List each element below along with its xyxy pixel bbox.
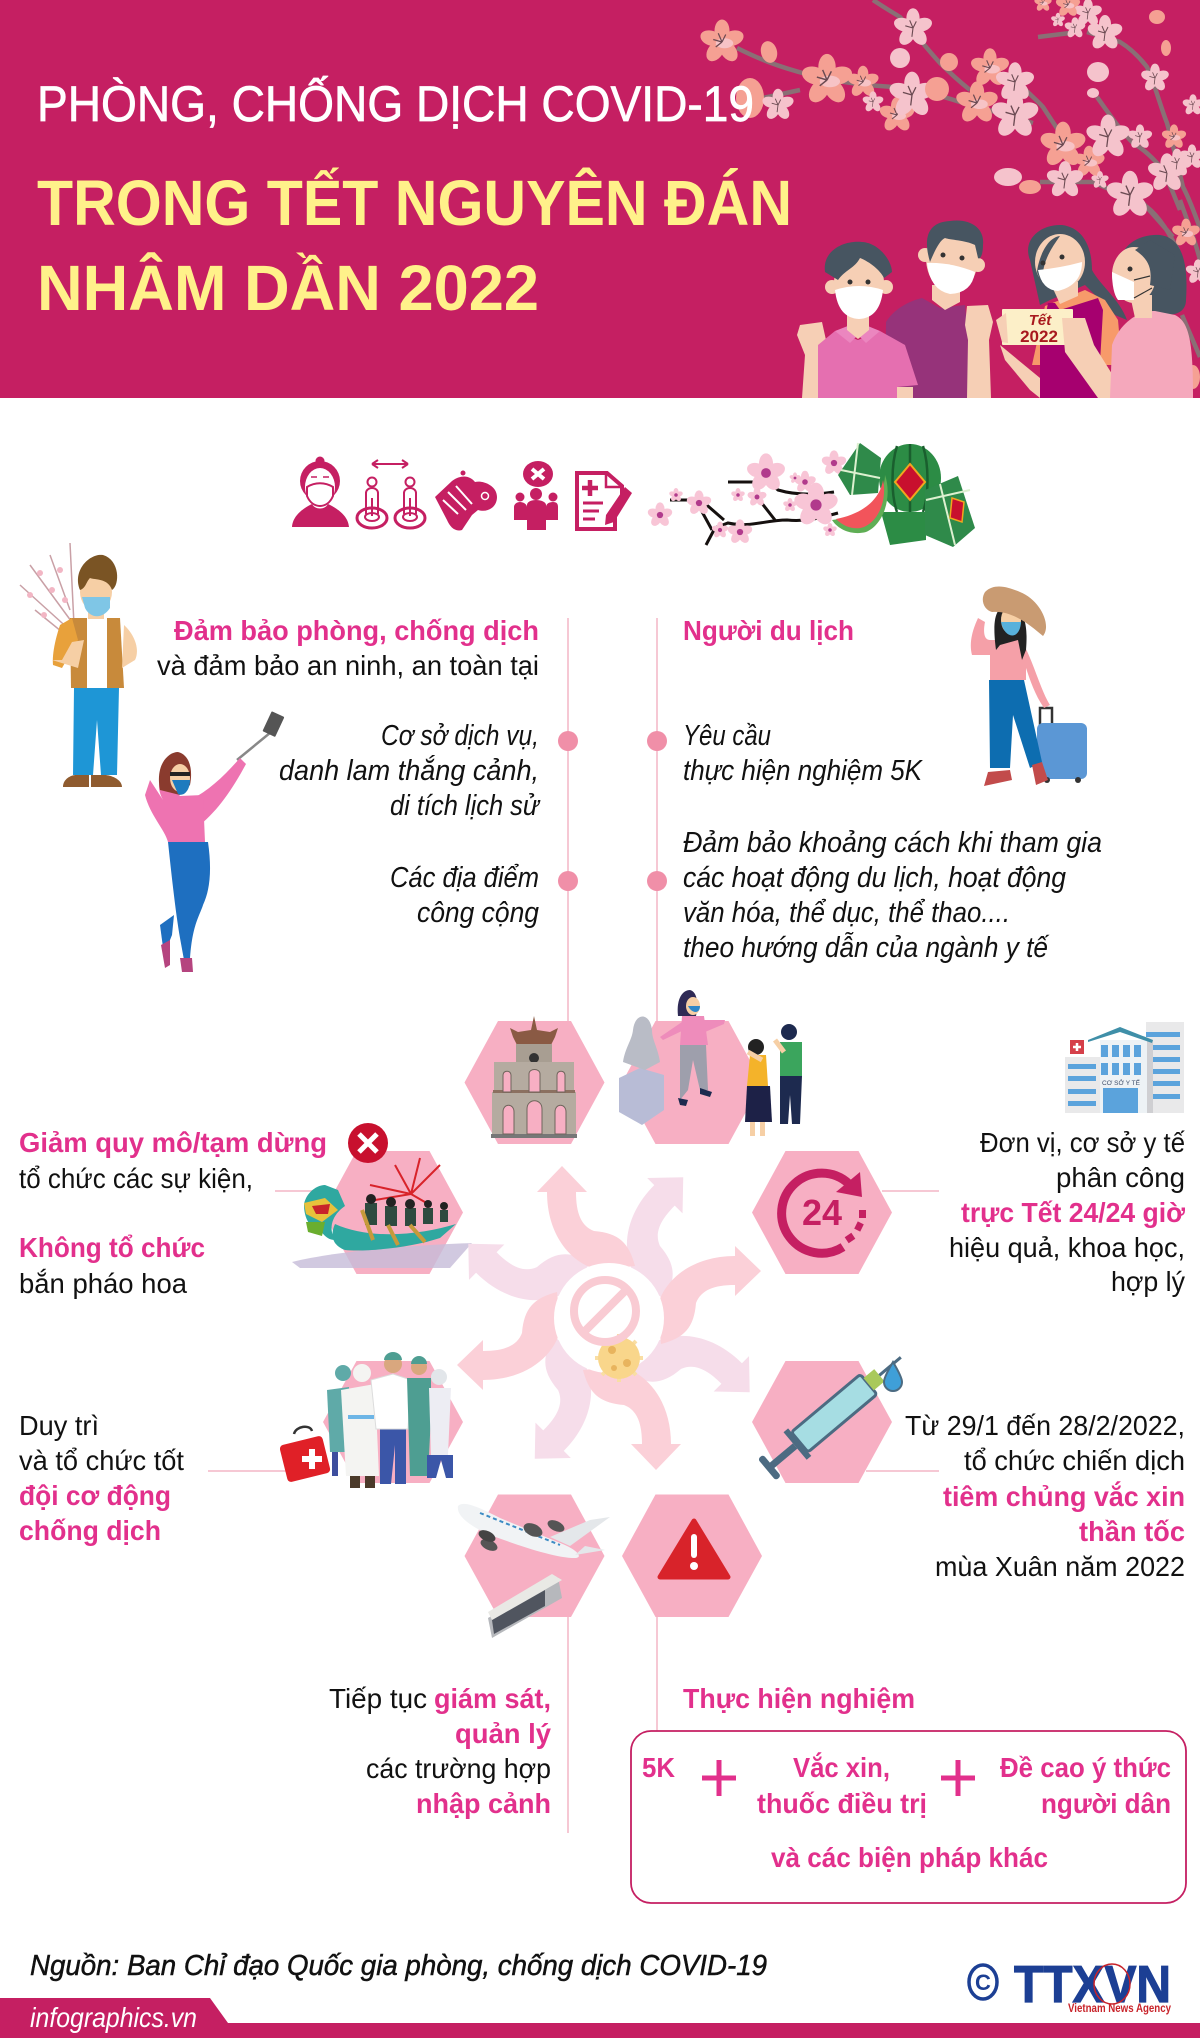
text: on-duty health units: Đơn vị, cơ sở y tế [980,1127,1185,1158]
illustration: four masked people [797,220,1193,398]
text: reduce events: Không tổ chức [19,1232,205,1263]
text: vaccination campaign: tiêm chủng vắc xin [943,1481,1185,1512]
hexagon: warning [622,1494,762,1617]
timeline lines [208,618,939,1833]
illustration: small blossom branch [647,450,847,545]
text: entry monitoring: quản lý [455,1718,551,1749]
text: service venues: Cơ sở dịch vụ, [381,720,539,752]
illustration: watermelon and banh chung [832,443,975,547]
text: service venues: di tích lịch sử [390,790,541,822]
text: mobile teams: Duy trì [19,1410,99,1441]
panel: measures box: và các biện pháp khác [771,1842,1048,1873]
person: pink shirt man [797,242,918,398]
arrow: pink set [457,1166,761,1470]
title line 2: TRONG TẾT NGUYÊN ĐÁN [37,166,792,239]
illustration: syringe [755,1344,912,1484]
text: on-duty health units: hiệu quả, khoa học, [949,1232,1185,1263]
illustration: hospital [1065,1022,1184,1113]
text: on-duty health units: trực Tết 24/24 giờ [961,1197,1185,1228]
illustration: man with blossom branch [20,543,137,787]
card: Tết 2022: Tết [1029,312,1052,329]
text: distancing: theo hướng dẫn của ngành y tế [683,931,1050,964]
text: entry monitoring [329,1683,551,1819]
timeline dots [558,731,667,891]
logo: TTXVN: TTXVN [1014,1956,1171,2014]
text: 5K requirement: Yêu cầu [683,720,771,752]
icon: virus prohibited [574,1280,643,1382]
text: service venues: danh lam thắng cảnh, [279,754,539,787]
illustration: blossom branches [698,0,1200,389]
person: woman in profile [1110,235,1193,398]
icon: plus [702,1760,736,1796]
person: woman holding card [996,225,1127,398]
text: mobile teams: chống dịch [19,1515,161,1546]
icon: no gathering [514,461,558,530]
hexagon: 24 hours [752,1151,892,1274]
text: reduce events [19,1127,327,1299]
illustration: dragon boat and fireworks [292,1158,472,1268]
person: purple shirt man [885,220,993,398]
icon row: 5K pictograms [292,456,632,530]
illustration: tower [491,1016,577,1138]
text: entry monitoring: nhập cảnh [416,1788,551,1819]
text: vaccination campaign: tổ chức chiến dịch [964,1445,1185,1476]
hexagon: syringe [752,1361,892,1483]
text: left heading [157,615,539,681]
text: reduce events: Giảm quy mô/tạm dừng [19,1127,327,1158]
illustration: statue and visitors [619,990,802,1136]
text: vaccination campaign [905,1410,1185,1582]
text: on-duty health units: phân công [1056,1162,1185,1193]
hexagon: dragon boat [323,1151,463,1274]
text: public places: công cộng [417,897,539,929]
text: service venues [279,720,541,822]
text: distancing: văn hóa, thể dục, thể thao.... [683,897,1010,929]
logo: TTXVN: C [975,1970,991,1995]
text: entry monitoring: các trường hợp [366,1753,551,1784]
text: mobile teams: đội cơ động [19,1480,171,1511]
icon: plus [941,1760,975,1796]
panel: measures box [631,1731,1186,1903]
illustration: medics and first-aid kit [279,1352,453,1488]
text: reduce events: bắn pháo hoa [19,1268,187,1299]
footer band [0,1998,1200,2038]
text: entry monitoring: giám sát, [434,1683,551,1714]
text: 5K requirement: thực hiện nghiệm 5K [683,755,923,787]
illustration: hospital: CƠ SỞ Y TẾ [1102,1077,1141,1087]
text: on-duty health units [949,1127,1185,1297]
icon: mask person [292,456,349,527]
logo: TTXVN: Vietnam News Agency [1068,2001,1171,2015]
icon: cancel X [348,1123,388,1163]
icon: 24 hours: 24 [802,1192,842,1233]
text: vaccination campaign: Từ 29/1 đến 28/2/2022, [905,1410,1185,1441]
footer url: infographics.vn [30,2002,197,2033]
text: mobile teams [19,1410,184,1546]
text: on-duty health units: hợp lý [1111,1266,1185,1297]
title line 1: PHÒNG, CHỐNG DỊCH COVID-19 [37,75,754,132]
text: reduce events: tổ chức các sự kiện, [19,1163,253,1194]
text: 5K requirement [683,720,923,787]
panel: measures box: người dân [1041,1788,1171,1819]
card: Tết 2022 [1002,309,1073,346]
text: public places [390,862,539,929]
text: distancing [683,827,1102,964]
hexagon: tower [464,1021,604,1144]
icon: 24 hours [782,1172,866,1253]
text: tourists heading: Người du lịch [683,615,854,646]
panel: measures box: Đề cao ý thức [1000,1752,1171,1783]
icon: warning triangle [660,1521,728,1577]
diagram: central radiating arrows [451,1160,767,1476]
illustration: woman taking selfie [145,711,284,972]
text: distancing: các hoạt động du lịch, hoạt động [683,862,1066,894]
source: Nguồn: Ban Chỉ đạo Quốc gia phòng, chống dịch COVID-19 [30,1950,767,1982]
text: vaccination campaign: mùa Xuân năm 2022 [935,1551,1185,1582]
text: public places: Các địa điểm [390,862,539,894]
text: distancing: Đảm bảo khoảng cách khi tham gia [683,827,1102,859]
text: vaccination campaign: thần tốc [1079,1516,1185,1547]
panel: measures box: thuốc điều trị [757,1788,927,1819]
text: left heading: Đảm bảo phòng, chống dịch [174,615,539,646]
text: entry monitoring: Tiếp tục [329,1683,427,1714]
illustration: plane and bus [458,1504,610,1638]
illustration: tourist with suitcase [971,587,1087,786]
hexagon: transport [464,1494,604,1617]
icon: declaration form [577,473,632,529]
panel: measures box: Vắc xin, [793,1752,890,1783]
hexagon: visitors [622,1021,762,1144]
hexagon: medics [323,1361,463,1483]
text: implement heading: Thực hiện nghiệm [683,1683,915,1714]
card: Tết 2022: 2022 [1020,327,1058,346]
panel: measures box: 5K [642,1752,675,1783]
header background [0,0,1200,398]
text: left heading: và đảm bảo an ninh, an toàn tại [157,650,539,681]
icon: distance [357,460,425,528]
title line 3: NHÂM DẦN 2022 [37,251,539,324]
arrow: lavender set [451,1160,767,1476]
text: mobile teams: và tổ chức tốt [19,1445,184,1476]
icon: hand washing [435,470,497,530]
